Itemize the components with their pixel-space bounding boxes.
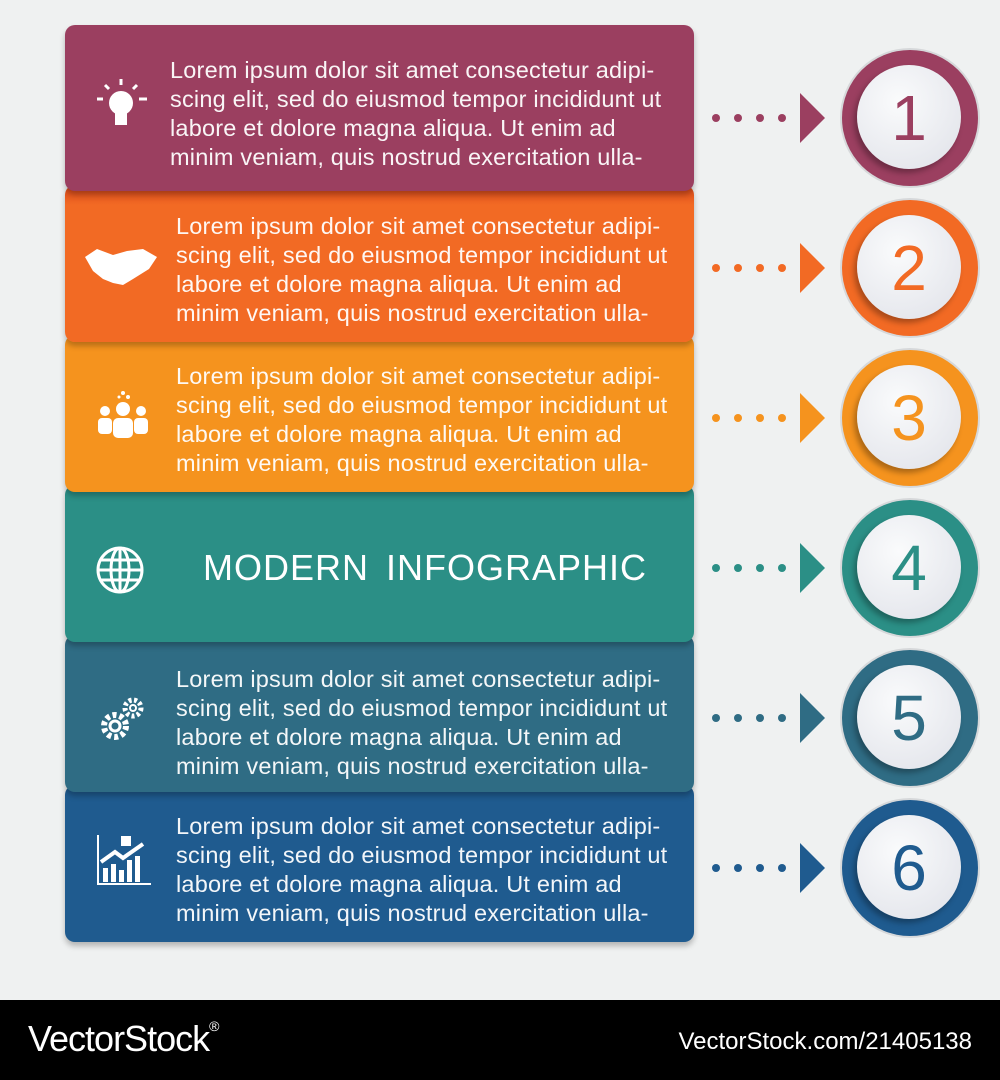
text 6 (176, 813, 667, 926)
circle 3: 3 (891, 382, 927, 454)
arrow 6 (712, 843, 825, 893)
text 1: minim veniam, quis nostrud exercitation ulla- (170, 144, 643, 170)
text 2 (176, 213, 667, 326)
text 1: labore et dolore magna aliqua. Ut enim ad (170, 115, 616, 141)
text 2: Lorem ipsum dolor sit amet consectetur adipi- (176, 213, 660, 239)
footer url: VectorStock.com/21405138 (678, 1028, 972, 1055)
panel 5 (65, 635, 694, 792)
text 5: Lorem ipsum dolor sit amet consectetur adipi- (176, 666, 660, 692)
footer (0, 1000, 1000, 1080)
circle 2 (842, 200, 978, 336)
icon: globe (96, 546, 144, 594)
arrow 1 (712, 93, 825, 143)
circle 2: 2 (891, 232, 927, 304)
circle 3 (842, 350, 978, 486)
text 6: scing elit, sed do eiusmod tempor incididunt ut (176, 842, 667, 868)
text 2: scing elit, sed do eiusmod tempor incididunt ut (176, 242, 667, 268)
panel 2 (65, 185, 694, 342)
circle 1: 1 (891, 82, 927, 154)
panel 6 (65, 785, 694, 942)
footer logo: VectorStock® (28, 1018, 218, 1059)
text 1 (170, 57, 661, 170)
panel 1 (65, 25, 694, 191)
arrow 4 (712, 543, 825, 593)
text 2: minim veniam, quis nostrud exercitation ulla- (176, 300, 649, 326)
icon: lightbulb (97, 79, 147, 125)
icon: handshake (85, 249, 157, 285)
circle 4 (842, 500, 978, 636)
text 6: labore et dolore magna aliqua. Ut enim ad (176, 871, 622, 897)
circle 1 (842, 50, 978, 186)
icon: chart (97, 835, 151, 885)
text 2: labore et dolore magna aliqua. Ut enim ad (176, 271, 622, 297)
text 5: minim veniam, quis nostrud exercitation ulla- (176, 753, 649, 779)
arrow 5 (712, 693, 825, 743)
panel 4 (65, 485, 694, 642)
text 6: minim veniam, quis nostrud exercitation ulla- (176, 900, 649, 926)
text 3 (176, 363, 667, 476)
text 5 (176, 666, 667, 779)
text 1: scing elit, sed do eiusmod tempor incididunt ut (170, 86, 661, 112)
text 1: Lorem ipsum dolor sit amet consectetur adipi- (170, 57, 654, 83)
circle 6 (842, 800, 978, 936)
icon: team (98, 391, 148, 438)
text 5: scing elit, sed do eiusmod tempor incididunt ut (176, 695, 667, 721)
circle 5 (842, 650, 978, 786)
text 3: minim veniam, quis nostrud exercitation ulla- (176, 450, 649, 476)
text 3: labore et dolore magna aliqua. Ut enim ad (176, 421, 622, 447)
circle 6: 6 (891, 832, 927, 904)
text 3: scing elit, sed do eiusmod tempor incididunt ut (176, 392, 667, 418)
text 5: labore et dolore magna aliqua. Ut enim ad (176, 724, 622, 750)
circle 5: 5 (891, 682, 927, 754)
arrow 3 (712, 393, 825, 443)
title: MODERN INFOGRAPHIC (203, 547, 647, 588)
arrow 2 (712, 243, 825, 293)
circle 4: 4 (891, 532, 927, 604)
panel 3 (65, 335, 694, 492)
text 6: Lorem ipsum dolor sit amet consectetur adipi- (176, 813, 660, 839)
text 3: Lorem ipsum dolor sit amet consectetur adipi- (176, 363, 660, 389)
icon: gears (101, 698, 144, 740)
